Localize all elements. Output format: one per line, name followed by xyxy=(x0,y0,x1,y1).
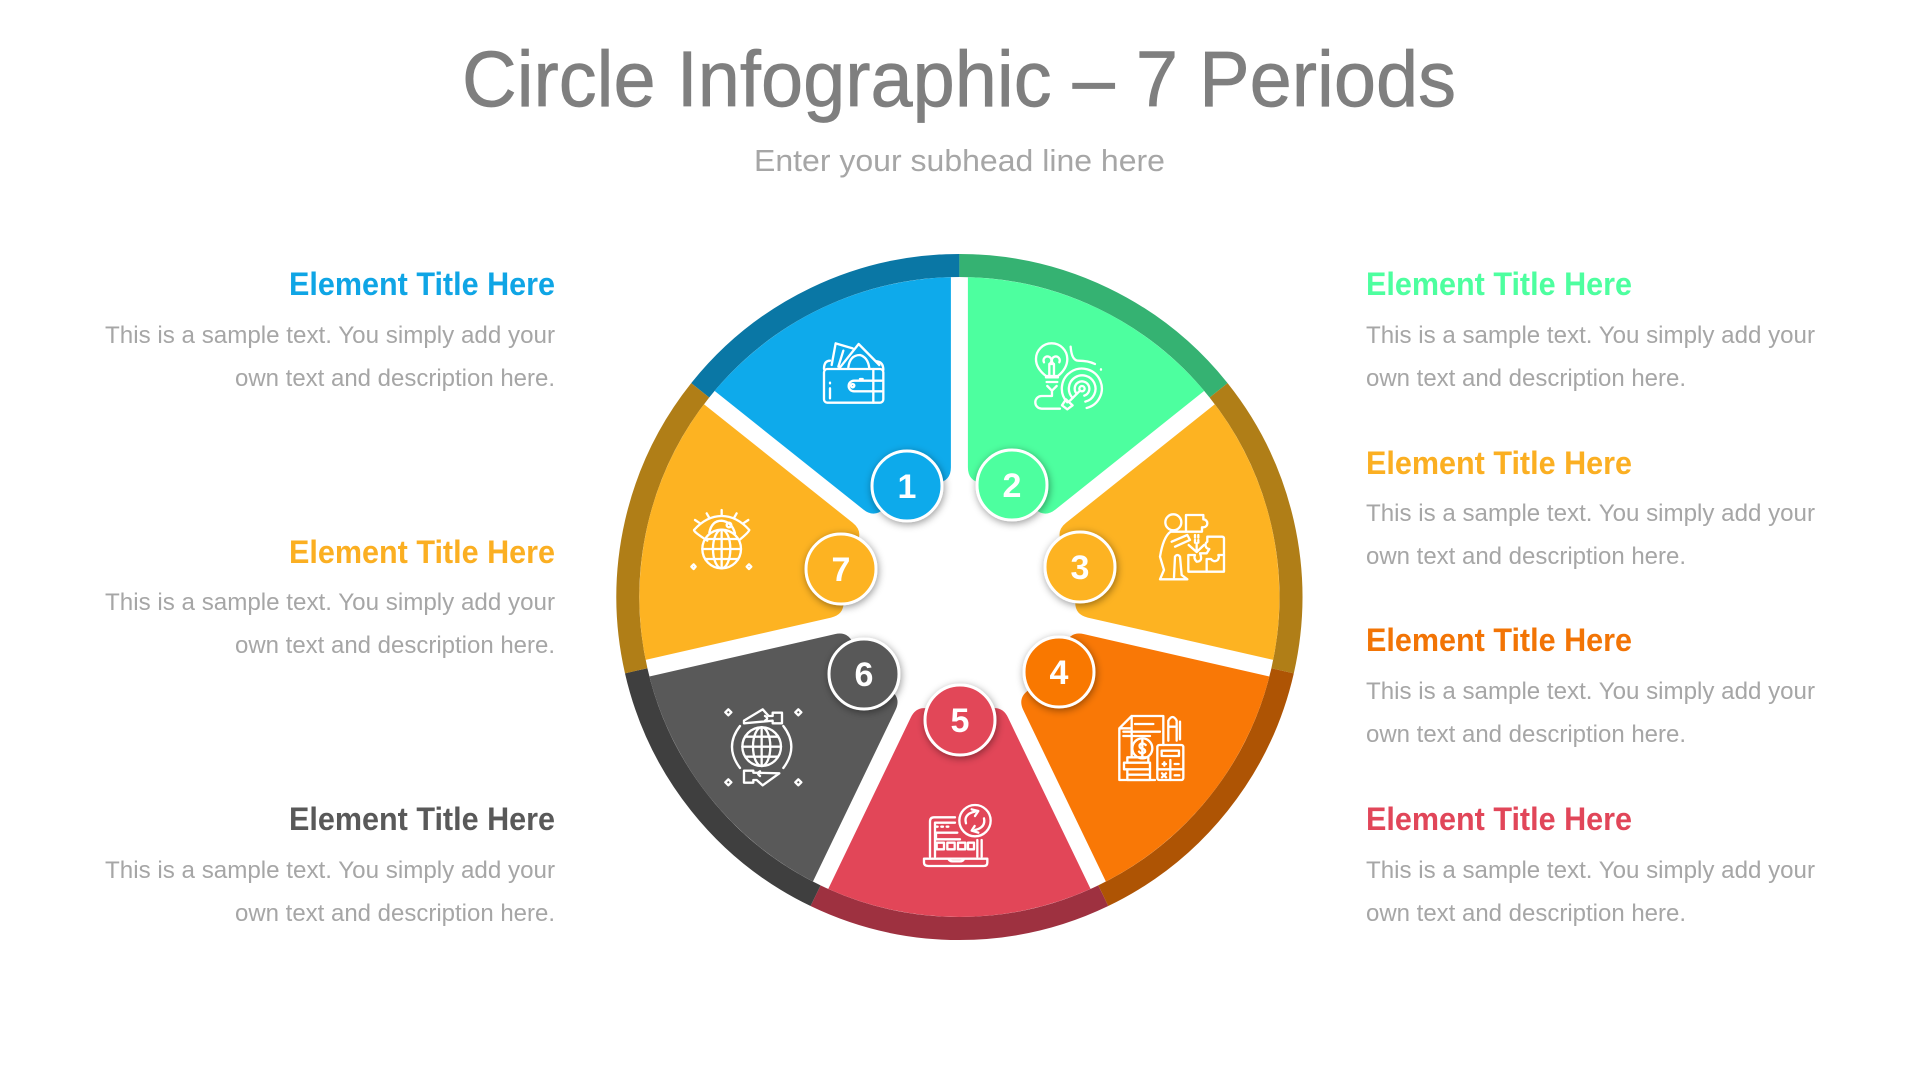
text block: element 1: This is a sample text. You simply add your xyxy=(105,322,555,349)
text block: element 5: Element Title Here xyxy=(1366,801,1632,837)
badge 1: 1 xyxy=(898,468,916,506)
badge 7: 7 xyxy=(832,551,850,589)
text block: element 1 xyxy=(105,266,555,392)
icon: eye and globe xyxy=(691,510,751,569)
badge 3 xyxy=(1045,532,1115,602)
text block: element 6 xyxy=(105,801,555,927)
text block: element 1: Element Title Here xyxy=(289,266,555,302)
badge 2 xyxy=(977,450,1047,520)
icon: wallet xyxy=(824,343,883,403)
text block: element 2: own text and description here. xyxy=(1366,365,1686,392)
text block: element 3 xyxy=(1366,445,1815,570)
text block: element 3: own text and description here. xyxy=(1366,543,1686,570)
text block: element 7 xyxy=(105,534,555,659)
title: Circle Infographic – 7 Periods xyxy=(462,34,1456,123)
text block: element 3: Element Title Here xyxy=(1366,445,1632,481)
text block: element 6: own text and description here. xyxy=(235,900,555,927)
icon: finance documents and calculator xyxy=(1119,716,1183,780)
text block: element 5: This is a sample text. You simply add your xyxy=(1366,857,1815,884)
text block: element 6: This is a sample text. You simply add your xyxy=(105,857,555,884)
segment 6: grey xyxy=(611,554,962,916)
text block: element 5 xyxy=(1366,801,1815,927)
icon: globe in hands xyxy=(725,709,801,785)
badge 5 xyxy=(925,685,995,755)
icon: laptop with refresh xyxy=(924,805,991,866)
badge 2: 2 xyxy=(1003,467,1021,505)
badge 4 xyxy=(1024,637,1094,707)
text block: element 4: own text and description here. xyxy=(1366,721,1686,748)
text block: element 5: own text and description here. xyxy=(1366,900,1686,927)
text block: element 4 xyxy=(1366,622,1815,748)
segment 4: orange xyxy=(957,554,1308,916)
subtitle: Enter your subhead line here xyxy=(754,143,1165,178)
badge 5: 5 xyxy=(951,702,969,740)
badge 7 xyxy=(806,534,876,604)
badge 4: 4 xyxy=(1050,654,1069,692)
text block: element 4: Element Title Here xyxy=(1366,622,1632,658)
text block: element 7: own text and description here. xyxy=(235,632,555,659)
text block: element 1: own text and description here. xyxy=(235,365,555,392)
circle diagram xyxy=(604,236,1315,929)
text block: element 7: This is a sample text. You simply add your xyxy=(105,589,555,616)
text block: element 2: Element Title Here xyxy=(1366,266,1632,302)
segment 1: blue xyxy=(686,236,1041,559)
segment 5: red xyxy=(816,708,1103,929)
text block: element 4: This is a sample text. You simply add your xyxy=(1366,678,1815,705)
badge 6: 6 xyxy=(855,656,873,694)
icon: person with puzzle xyxy=(1160,514,1224,579)
text block: element 2: This is a sample text. You simply add your xyxy=(1366,322,1815,349)
segment 3: yellow xyxy=(1036,383,1315,713)
text block: element 3: This is a sample text. You simply add your xyxy=(1366,500,1815,527)
text block: element 2 xyxy=(1366,266,1815,392)
badge 1 xyxy=(872,451,942,521)
text block: element 6: Element Title Here xyxy=(289,801,555,837)
segment 2: green xyxy=(878,236,1233,559)
badge 3: 3 xyxy=(1071,549,1089,587)
text block: element 7: Element Title Here xyxy=(289,534,555,570)
icon: bulb and target xyxy=(1035,343,1102,409)
badge 6 xyxy=(829,639,899,709)
segment 7: yellow xyxy=(604,383,883,713)
